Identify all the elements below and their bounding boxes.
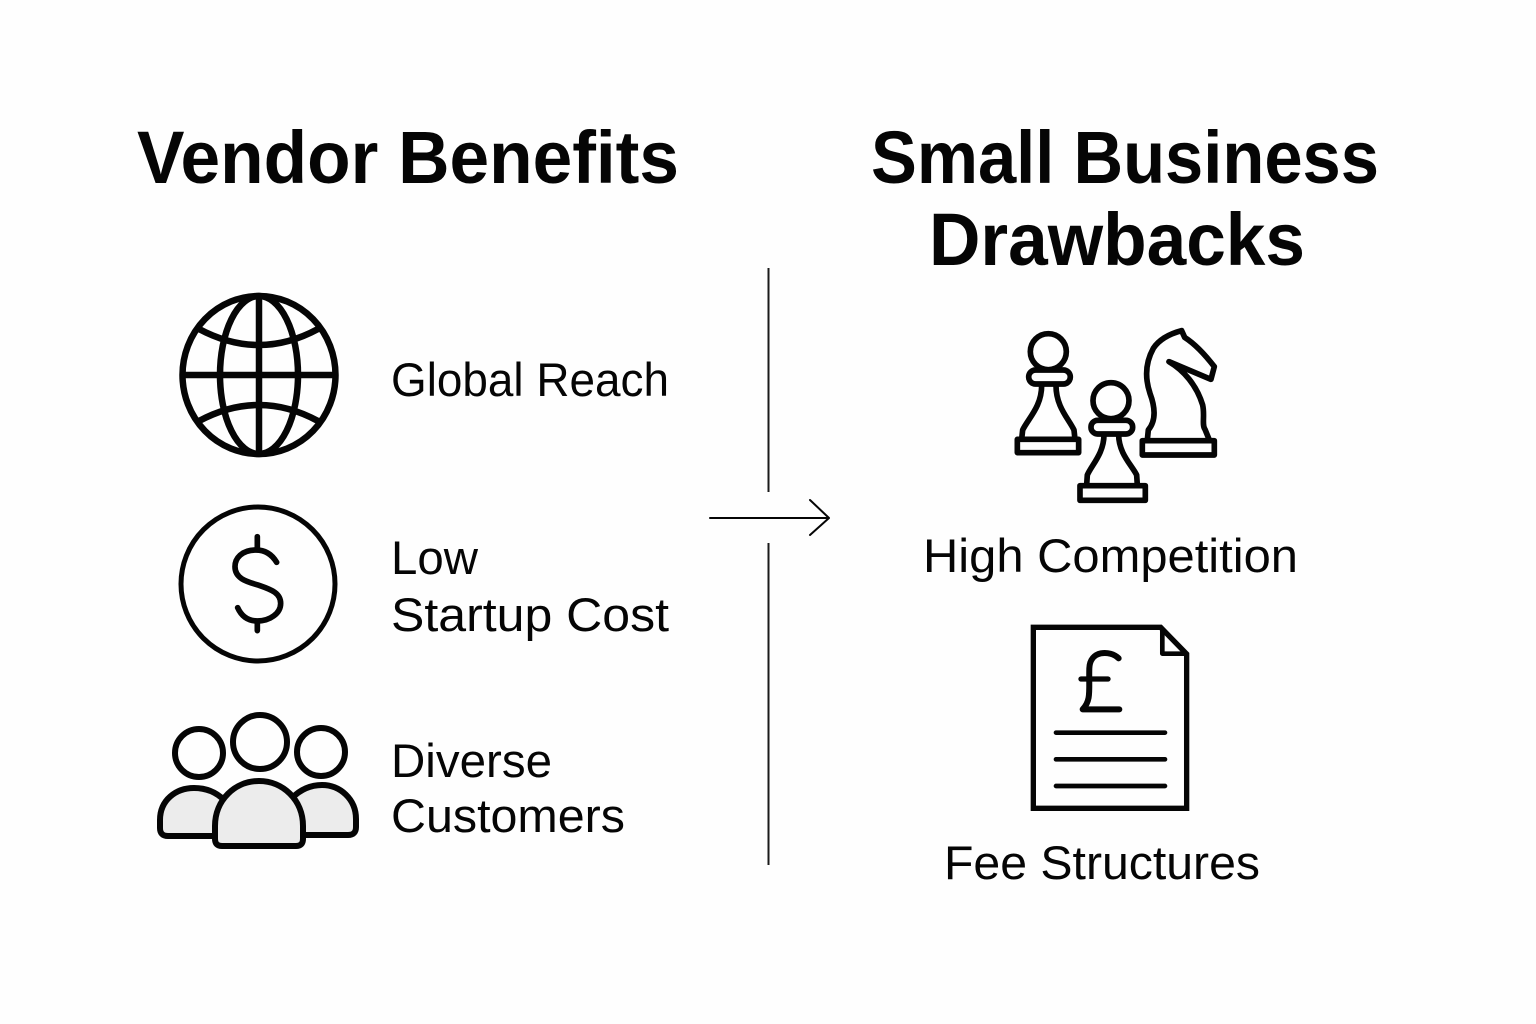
- icon: group of customers: [160, 715, 356, 846]
- text: Diverse Customers: [391, 734, 625, 842]
- first pawn: [1017, 334, 1079, 453]
- text: High Competition: High Competition: [923, 529, 1298, 582]
- icon: fee document with pound sign: [1033, 627, 1187, 808]
- heading: Small Business Drawbacks: [871, 116, 1379, 281]
- icon: chess pieces: [1017, 331, 1214, 500]
- arrow: benefits to drawbacks: [710, 500, 829, 535]
- icon: globe: [182, 296, 336, 454]
- divider: upper vertical line: [768, 268, 770, 492]
- text: Low Startup Cost: Low: [391, 531, 479, 584]
- text: Low Startup Cost: [391, 531, 669, 641]
- heading: Small Business Drawbacks: Drawbacks: [929, 198, 1305, 281]
- knight: [1142, 331, 1214, 455]
- divider: lower vertical line: [768, 543, 770, 865]
- icon: dollar coin: [181, 507, 335, 661]
- text: Diverse Customers: Customers: [391, 789, 625, 842]
- heading: Small Business Drawbacks: Small Business: [871, 116, 1379, 199]
- second pawn: [1080, 383, 1145, 500]
- text: Fee Structures: Fee Structures: [944, 836, 1260, 889]
- text: Low Startup Cost: Startup Cost: [391, 588, 669, 641]
- text: Global Reach: Global Reach: [391, 353, 669, 406]
- text: Diverse Customers: Diverse: [391, 734, 552, 787]
- heading: Vendor Benefits: Vendor Benefits: [137, 116, 679, 199]
